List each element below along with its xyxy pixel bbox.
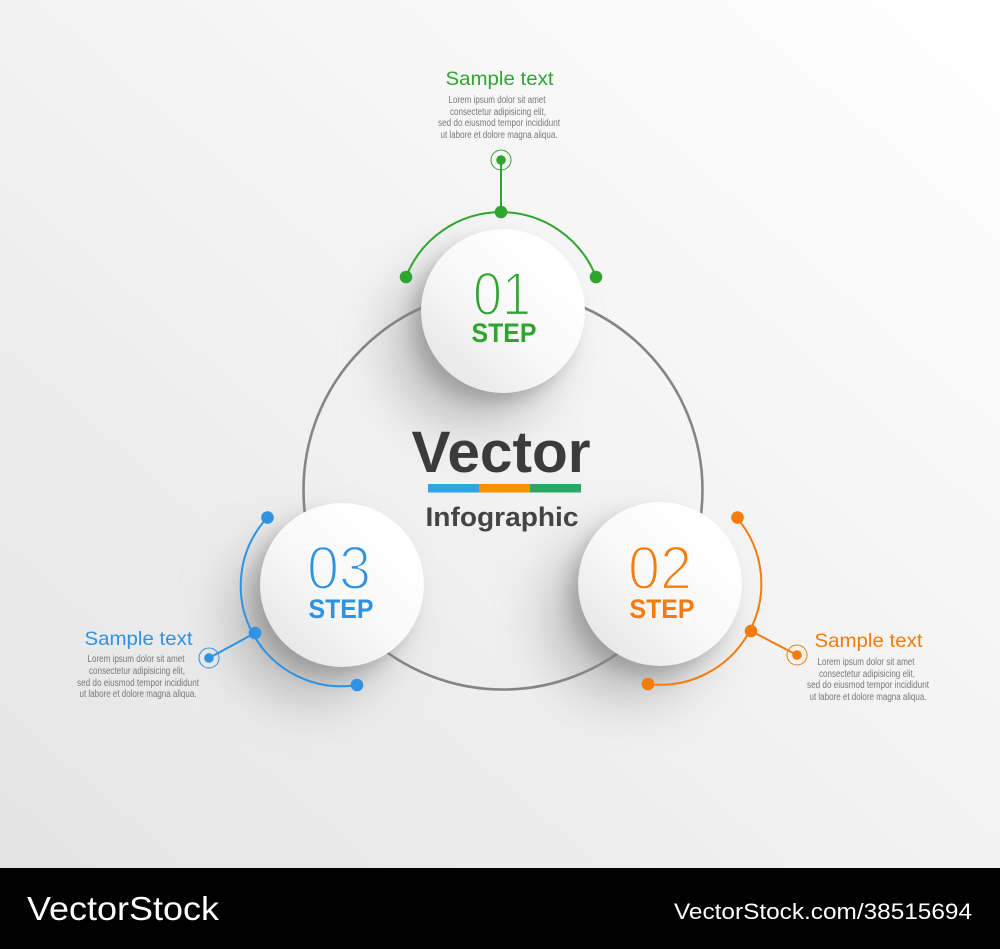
text block: left blue: Lorem ipsum dolor sit amet: [88, 654, 185, 665]
disc 02: [578, 502, 742, 666]
text block: left blue: [77, 628, 199, 700]
disc shadow 01: [390, 242, 573, 426]
footer logo: VectorStock: [27, 890, 220, 927]
footer band: [0, 868, 1000, 949]
text block: right orange: Sample text: [814, 630, 923, 652]
label step 02: STEP: [630, 594, 694, 624]
text block: left blue: ut labore et dolore magna aliqua.: [80, 689, 196, 700]
tricolour bar: [428, 484, 581, 492]
text block: top green: consectetur adipisicing elit,: [450, 107, 546, 118]
arc 01: [406, 212, 596, 277]
number 01: 01: [473, 260, 531, 328]
number 02: 02: [628, 534, 692, 602]
title word: Vector: [412, 420, 590, 485]
connector 03: [199, 511, 363, 691]
text block: top green: ut labore et dolore magna aliqua.: [440, 130, 558, 141]
disc shadow 03: [229, 516, 412, 700]
text block: right orange: Lorem ipsum dolor sit amet: [818, 657, 915, 668]
text block: right orange: sed do eiusmod tempor incididunt: [807, 680, 929, 691]
label step 03: STEP: [308, 594, 374, 624]
text block: right orange: ut labore et dolore magna aliqua.: [810, 692, 926, 703]
text block: top green: Sample text: [446, 68, 554, 90]
text block: left blue: Sample text: [84, 628, 193, 650]
number 03: 03: [307, 534, 371, 602]
text block: top green: [438, 68, 560, 141]
connector 02: [642, 511, 807, 690]
subtitle: Infographic: [426, 502, 578, 532]
text block: left blue: sed do eiusmod tempor incididunt: [77, 678, 199, 689]
footer url: VectorStock.com/38515694: [674, 899, 972, 924]
text block: right orange: [807, 630, 929, 703]
disc 03: [260, 503, 424, 667]
disc 01: [421, 229, 585, 393]
text block: left blue: consectetur adipisicing elit,: [89, 666, 185, 677]
text block: top green: Lorem ipsum dolor sit amet: [448, 95, 546, 106]
arc 03: [241, 518, 357, 686]
step 03 group: [199, 503, 424, 700]
text block: right orange: consectetur adipisicing elit,: [819, 669, 915, 680]
arc 02: [648, 518, 761, 685]
central title: [412, 420, 590, 532]
text block: top green: sed do eiusmod tempor incididunt: [438, 118, 560, 129]
step 02 group: [547, 502, 807, 699]
label step 01: STEP: [472, 318, 536, 348]
step 01 group: [390, 150, 602, 426]
central ring: [304, 290, 702, 690]
connector 01: [400, 150, 602, 283]
disc shadow 02: [547, 515, 730, 699]
